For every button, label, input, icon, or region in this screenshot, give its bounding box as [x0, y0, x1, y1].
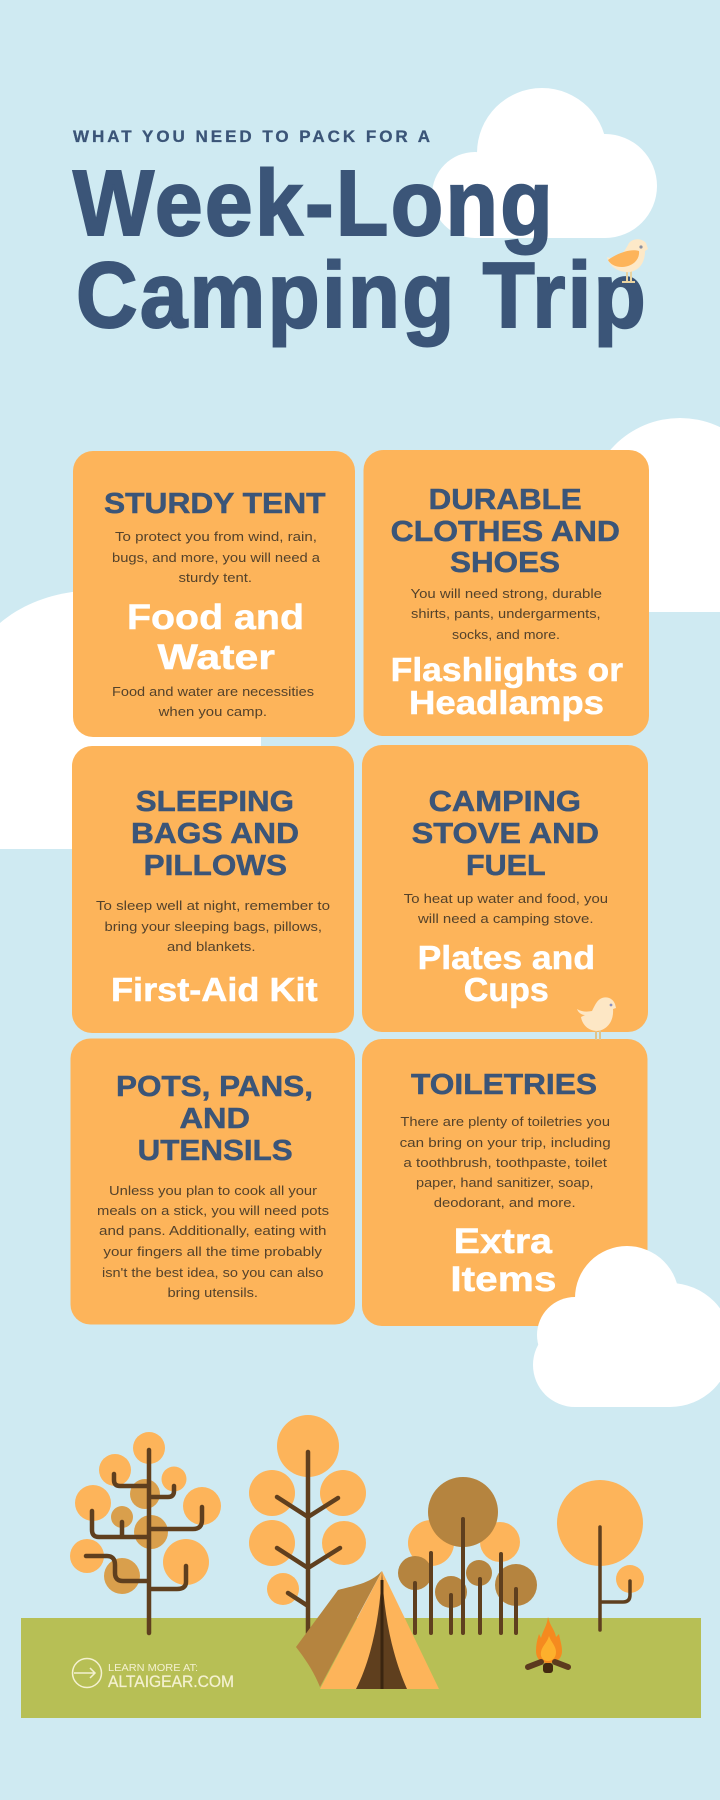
cloud: top right [432, 88, 657, 238]
title: week-long camping trip: Week-Long [73, 151, 555, 255]
heading: sleeping bags and pillows: SLEEPING [136, 786, 294, 818]
icon: bird on title [607, 239, 648, 283]
tree: left with curved branches [70, 1432, 221, 1633]
text: pots and pans description [97, 1183, 330, 1300]
call to action: learn more: ALTAIGEAR.COM [108, 1673, 234, 1691]
tree: right single circle [557, 1480, 644, 1630]
text: toiletries description: paper, hand sanitizer, soap, [416, 1175, 594, 1190]
heading: sturdy tent: STURDY TENT [104, 488, 326, 520]
panel: camping stove and plates [362, 745, 648, 1032]
text: sturdy tent description: To protect you from wind, rain, [115, 529, 317, 544]
icon: campfire [528, 1617, 568, 1673]
heading: first-aid kit: First-Aid Kit [111, 971, 318, 1008]
heading: flashlights or headlamps: Flashlights or [391, 651, 623, 688]
text: camping stove description: will need a camping stove. [417, 911, 594, 926]
heading: camping stove and fuel [412, 786, 599, 882]
text: toiletries description: can bring on your trip, including [400, 1135, 611, 1150]
text: pots and pans description: meals on a stick, you will need pots [97, 1203, 330, 1218]
heading: plates and cups [418, 939, 595, 1008]
panel: pots, pans, and utensils [70, 1038, 355, 1324]
heading: camping stove and fuel: STOVE AND [412, 818, 599, 850]
heading: durable clothes and shoes: CLOTHES AND [391, 516, 620, 548]
trees: cluster of round trees [398, 1477, 537, 1633]
heading: camping stove and fuel: FUEL [466, 850, 546, 882]
text: pots and pans description: bring utensils. [168, 1285, 258, 1300]
call to action: learn more [108, 1663, 234, 1691]
text: durable clothes description: socks, and more. [452, 627, 560, 642]
heading: toiletries: TOILETRIES [411, 1069, 597, 1101]
heading: pots, pans, and utensils [116, 1071, 313, 1167]
panel: sleeping bags and first-aid kit [72, 746, 354, 1033]
icon: arrow circle [72, 1658, 102, 1688]
heading: extra items [450, 1222, 556, 1299]
heading: plates and cups: Cups [464, 971, 549, 1008]
heading: food and water: Food and [127, 598, 304, 637]
heading: pots, pans, and utensils: POTS, PANS, [116, 1071, 313, 1103]
text: sleeping bags description: bring your sleeping bags, pillows, [104, 919, 322, 934]
heading: pots, pans, and utensils: UTENSILS [138, 1135, 293, 1167]
kicker: what you need to pack: WHAT YOU NEED TO PACK FOR A [73, 127, 430, 146]
text: pots and pans description: isn't the best idea, so you can also [102, 1265, 324, 1280]
cloud: right behind cards [588, 418, 720, 612]
text: pots and pans description: your fingers all the time probably [103, 1244, 323, 1259]
text: camping stove description: To heat up water and food, you [404, 891, 608, 906]
text: sleeping bags description [96, 898, 330, 954]
heading: camping stove and fuel: CAMPING [429, 786, 581, 818]
heading: extra items: Extra [454, 1222, 553, 1261]
heading: flashlights or headlamps [391, 651, 623, 721]
heading: sleeping bags and pillows: BAGS AND [131, 818, 299, 850]
text: food and water description: Food and water are necessities [112, 684, 315, 699]
heading: durable clothes and shoes: SHOES [450, 547, 560, 579]
heading: extra items: Items [450, 1260, 556, 1299]
title: week-long camping trip [73, 151, 648, 347]
text: toiletries description: a toothbrush, toothpaste, toilet [403, 1155, 607, 1170]
heading: food and water: Water [158, 638, 275, 677]
text: toiletries description: deodorant, and more. [434, 1195, 576, 1210]
text: durable clothes description: You will need strong, durable [410, 586, 602, 601]
title: week-long camping trip: Camping Trip [76, 243, 648, 347]
text: pots and pans description: and pans. Additionally, eating with [99, 1223, 326, 1238]
text: sleeping bags description: and blankets. [167, 939, 256, 954]
heading: pots, pans, and utensils: AND [180, 1103, 250, 1135]
text: sturdy tent description [112, 529, 321, 585]
cloud: bottom right [533, 1246, 720, 1407]
call to action: learn more: LEARN MORE AT: [108, 1663, 198, 1674]
heading: food and water [127, 598, 304, 677]
cloud: left behind cards [0, 590, 261, 849]
icon: tent [296, 1571, 439, 1689]
text: sturdy tent description: bugs, and more, you will need a [112, 550, 321, 565]
panel: toiletries and extra items [362, 1039, 648, 1326]
heading: sleeping bags and pillows: PILLOWS [144, 850, 287, 882]
text: durable clothes description: shirts, pants, undergarments, [411, 606, 601, 621]
heading: durable clothes and shoes: DURABLE [429, 484, 582, 516]
tree: tall with straight branches [249, 1415, 366, 1633]
icon: bird on card [577, 997, 616, 1040]
text: food and water description [112, 684, 315, 719]
text: toiletries description: There are plenty of toiletries you [400, 1114, 610, 1129]
text: food and water description: when you camp. [158, 704, 267, 719]
text: toiletries description [400, 1114, 611, 1210]
text: camping stove description [404, 891, 608, 926]
heading: plates and cups: Plates and [418, 939, 595, 976]
heading: durable clothes and shoes [391, 484, 620, 579]
text: pots and pans description: Unless you plan to cook all your [109, 1183, 318, 1198]
text: durable clothes description [410, 586, 602, 642]
panel: durable clothes and flashlights [364, 450, 649, 736]
text: sturdy tent description: sturdy tent. [178, 570, 252, 585]
ground [21, 1618, 701, 1718]
text: sleeping bags description: To sleep well at night, remember to [96, 898, 330, 913]
panel: sturdy tent and food and water [73, 451, 355, 737]
heading: flashlights or headlamps: Headlamps [409, 684, 604, 721]
heading: sleeping bags and pillows [131, 786, 299, 882]
